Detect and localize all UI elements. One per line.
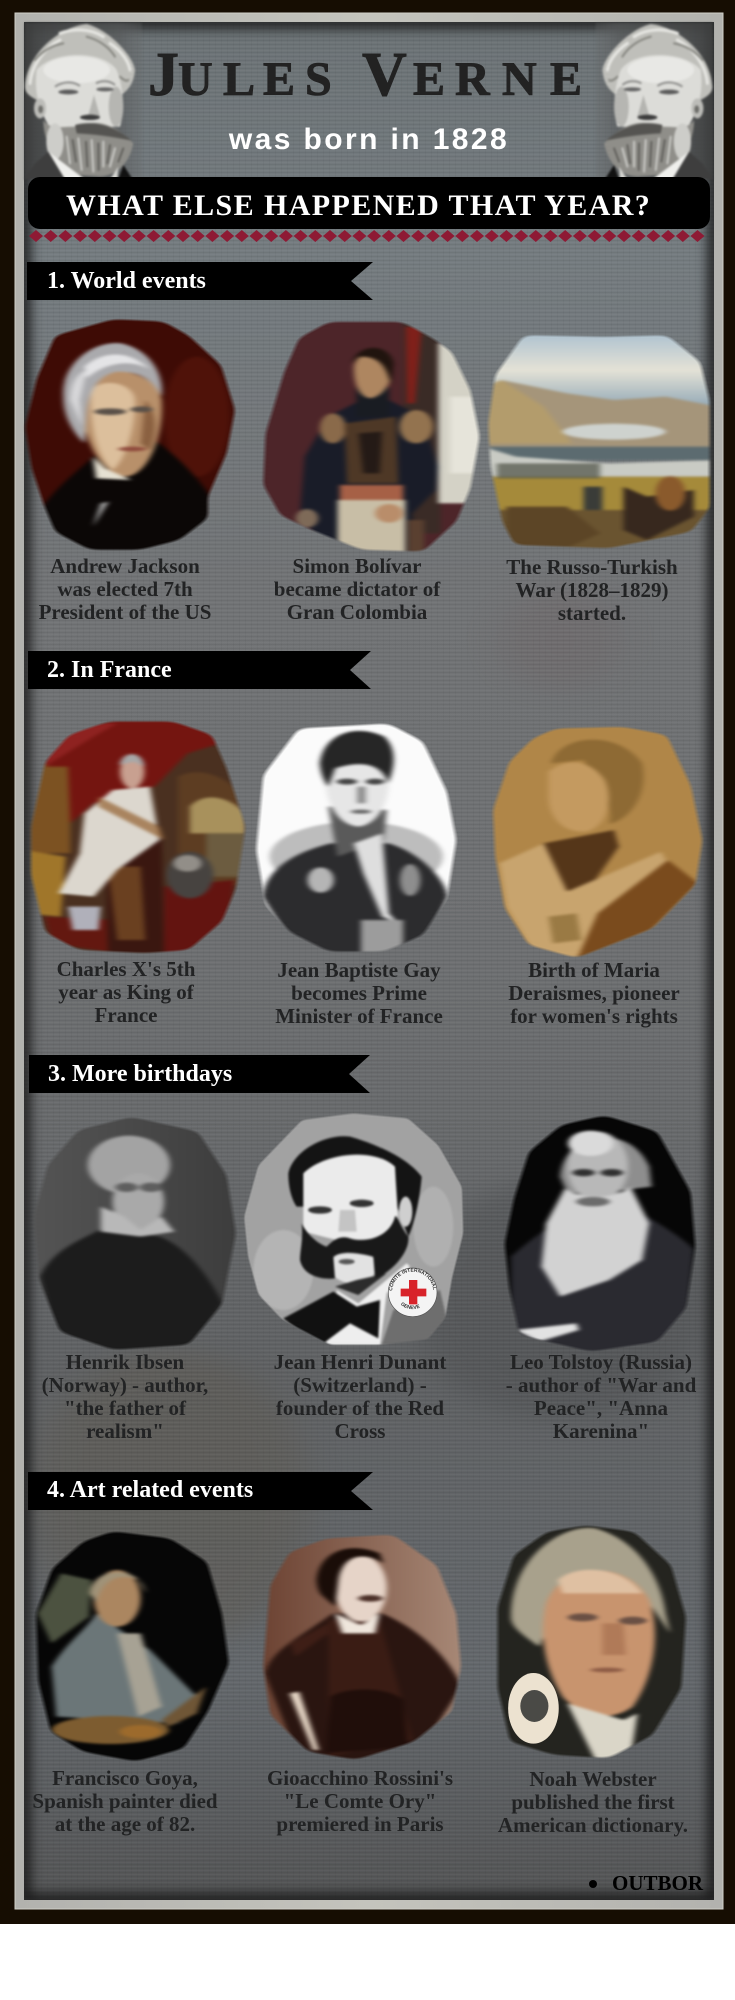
caption: Andrew Jackson: President of the US [39,600,211,624]
caption: Andrew Jackson: was elected 7th [57,577,193,601]
caption: Henrik Ibsen: realism" [86,1419,164,1443]
caption: Francisco Goya: at the age of 82. [55,1812,195,1836]
caption: Gioacchino Rossini: "Le Comte Ory" [284,1789,436,1813]
portrait: Andrew Jackson [24,318,236,551]
caption: Leo Tolstoy: Leo Tolstoy (Russia) [510,1350,692,1374]
panel: Gioacchino Rossini [253,1530,469,1836]
caption: Maria Deraismes: for women's rights [510,1004,678,1028]
portrait: Francisco Goya [34,1531,230,1762]
caption: Noah Webster: published the first [511,1790,675,1814]
caption: Jean Henri Dunant: Cross [335,1419,385,1443]
portrait: Maria Deraismes [492,726,704,958]
caption: Jean Baptiste Gay: Jean Baptiste Gay [277,958,441,982]
caption: Noah Webster: Noah Webster [529,1767,657,1791]
caption: Leo Tolstoy: Karenina" [553,1419,649,1443]
caption: Gioacchino Rossini: premiered in Paris [276,1812,444,1836]
caption: Henrik Ibsen: (Norway) - author, [42,1373,208,1397]
panel: Noah Webster [488,1520,694,1837]
caption: Gioacchino Rossini: Gioacchino Rossini's [267,1766,453,1790]
section banner: 3. More birthdays: 3. More birthdays [48,1061,232,1087]
caption: Russo-Turkish War: started. [558,601,626,625]
section banner: 4. Art related events [28,1472,373,1510]
caption: Charles X: year as King of [58,980,195,1004]
portrait: Charles X [23,717,253,957]
portrait: Gioacchino Rossini [262,1534,462,1760]
source credit: OUTBOR: OUTBOR [612,1871,704,1895]
panel: Henrik Ibsen [36,1118,237,1438]
header portrait: Jules Verne right [595,23,713,179]
caption: Andrew Jackson: Andrew Jackson [50,554,200,578]
diamond divider [29,230,704,242]
section banner: 2. In France: 2. In France [47,657,172,683]
caption: Henrik Ibsen: "the father of [64,1396,187,1420]
caption: Russo-Turkish War: War (1828–1829) [515,578,669,602]
caption: Maria Deraismes: Birth of Maria [528,958,660,982]
title: Jules Verne: JULES VERNE [148,41,582,109]
caption: Jean Henri Dunant: founder of the Red [276,1396,444,1420]
heading bar: what else happened [28,177,710,229]
caption: Leo Tolstoy: Peace", "Anna [534,1396,669,1420]
caption: Jean Henri Dunant: Jean Henri Dunant [274,1350,446,1374]
caption: Charles X: France [95,1003,157,1027]
portrait: Simon Bolivar [253,317,488,557]
heading bar: what else happened: WHAT ELSE HAPPENED THAT YEAR? [66,189,651,222]
caption: Russo-Turkish War: The Russo-Turkish [506,555,678,579]
panel: Jean Baptiste Gay [248,717,464,1028]
section banner: 4. Art related events: 4. Art related events [47,1477,253,1503]
caption: Jean Baptiste Gay: becomes Prime [291,981,427,1005]
caption: Francisco Goya: Francisco Goya, [52,1766,198,1790]
caption: Simon Bolivar: Simon Bolívar [293,554,421,578]
caption: Jean Henri Dunant: (Switzerland) - [293,1373,427,1397]
caption: Leo Tolstoy: - author of "War and [506,1373,697,1397]
panel: Andrew Jackson [24,318,236,619]
caption: Henrik Ibsen: Henrik Ibsen [66,1350,185,1374]
section banner: 3. More birthdays [29,1055,370,1093]
caption: Simon Bolivar: became dictator of [274,577,441,601]
caption: Charles X: Charles X's 5th [57,957,196,981]
portrait: Jean Baptiste Gay [248,717,464,957]
portrait: Henrik Ibsen [36,1118,237,1350]
caption: Noah Webster: American dictionary. [498,1813,688,1837]
header portrait: Jules Verne left [24,23,142,179]
caption: Simon Bolivar: Gran Colombia [287,600,428,624]
subtitle: was born in 1828: was born in 1828 [228,123,509,156]
panel: Charles X [23,717,253,1027]
caption: Jean Baptiste Gay: Minister of France [275,1004,443,1028]
portrait: Jean Henri Dunant: GENEVE [401,1302,420,1310]
portrait: Noah Webster [496,1525,688,1758]
caption: Francisco Goya: Spanish painter died [32,1789,218,1813]
panel: Francisco Goya [28,1527,239,1836]
section banner: 1. World events: 1. World events [47,268,206,294]
caption: Maria Deraismes: Deraismes, pioneer [508,981,680,1005]
panel: Leo Tolstoy [497,1110,703,1443]
portrait: Leo Tolstoy [503,1116,697,1352]
painting: Russo-Turkish War [483,330,717,553]
panel: Simon Bolivar [253,317,488,624]
panel: Jean Henri Dunant [244,1113,464,1443]
panel: Maria Deraismes [483,720,712,1028]
portrait: Jean Henri Dunant: COMITE INTERNATIONAL [388,1268,436,1291]
portrait: Jean Henri Dunant [244,1113,464,1346]
section banner: 2. In France [28,651,371,689]
section banner: 1. World events [27,262,373,300]
panel: Russo-Turkish War [483,330,717,625]
